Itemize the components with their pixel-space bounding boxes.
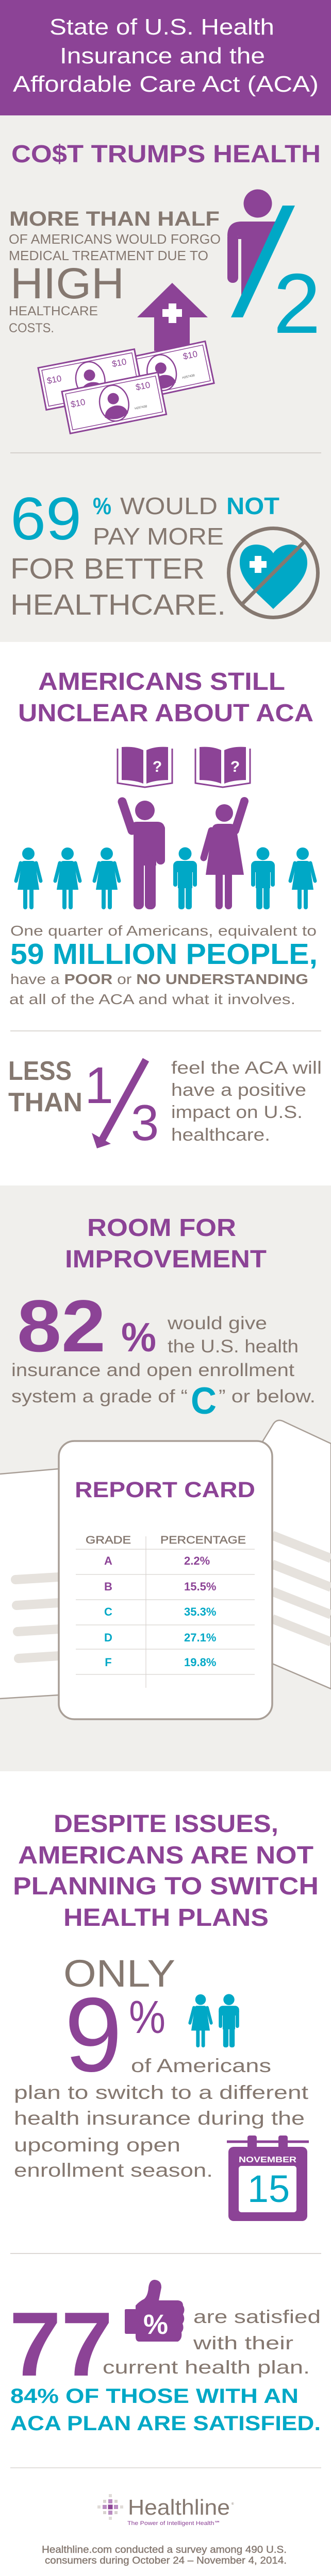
heading: HEALTH PLANS xyxy=(63,1904,269,1931)
heading: DESPITE ISSUES, xyxy=(54,1810,278,1838)
icon: ten dollar bills: $10 xyxy=(118,367,134,380)
icon: ten dollar bills: $10 xyxy=(70,397,86,410)
heading: AMERICANS STILL xyxy=(38,668,285,696)
stat: 77% satisfied: ACA PLAN ARE SATISFIED. xyxy=(10,2412,321,2435)
icon: ten dollar bills: H257438 xyxy=(135,405,148,411)
footer: healthline logo xyxy=(97,2494,234,2527)
stat: 82% xyxy=(11,1285,316,1422)
stat: 82%: C xyxy=(191,1380,217,1422)
title: Affordable Care Act (ACA) xyxy=(13,72,319,97)
stat: only 9%: % xyxy=(129,1992,166,2043)
stat: 77% satisfied: 77 xyxy=(9,2293,113,2395)
stat: less than one third: have a positive xyxy=(171,1080,306,1100)
text block: more than half: HEALTHCARE xyxy=(9,304,98,318)
table: GRADE xyxy=(86,1534,131,1546)
icon: ten dollar bills: H257438 xyxy=(182,374,195,380)
stat: 69% would not pay more: FOR BETTER xyxy=(10,552,205,585)
table: F xyxy=(105,1656,112,1669)
text block: more than half: MEDICAL TREATMENT DUE TO xyxy=(9,248,208,263)
table: 19.8% xyxy=(184,1656,216,1669)
panel: not planning to switch xyxy=(9,1810,321,2435)
stat: 82%: ” or below. xyxy=(219,1386,316,1406)
stat: 82%: % xyxy=(121,1314,156,1360)
icon: ten dollar bills: $10 xyxy=(135,380,151,393)
heading: ROOM FOR xyxy=(87,1214,236,1242)
icon: people row xyxy=(16,801,315,909)
icon: books with question marks: ? xyxy=(230,758,240,775)
stat: only 9%: 9 xyxy=(64,1976,122,2094)
icon: thumbs up with percent: % xyxy=(143,2309,168,2340)
text block: 59 million people: at all of the ACA and what it involves. xyxy=(9,991,295,1007)
table: PERCENTAGE xyxy=(160,1534,246,1546)
stat: 77% satisfied: with their xyxy=(193,2332,293,2353)
heading: UNCLEAR ABOUT ACA xyxy=(18,700,313,727)
icon: ten dollar bills: $10 xyxy=(111,357,127,369)
stat: 77% satisfied: are satisfied xyxy=(193,2306,321,2327)
stat: less than one third xyxy=(8,1056,322,1151)
report card xyxy=(59,1441,272,1719)
icon: half person with one-half: 2 xyxy=(273,256,321,351)
stat: only 9%: health insurance during the xyxy=(14,2108,305,2129)
stat: 69% would not pay more: 69 xyxy=(10,485,81,552)
table: D xyxy=(104,1631,112,1644)
text block: more than half: HIGH xyxy=(10,259,124,308)
icon: ten dollar bills: $10 xyxy=(182,349,198,362)
heading: PLANNING TO SWITCH xyxy=(13,1873,319,1900)
stat: 69% would not pay more: PAY MORE xyxy=(93,523,224,550)
stat: 69% would not pay more: WOULD xyxy=(120,493,218,519)
stat: less than one third: THAN xyxy=(8,1088,82,1117)
text block: more than half: OF AMERICANS WOULD FORGO xyxy=(9,231,221,247)
title xyxy=(13,14,319,97)
stat: 69% would not pay more: NOT xyxy=(226,493,279,519)
footer: source and copyright: consumers during October 24 – November 4, 2014. xyxy=(45,2555,287,2566)
big woman xyxy=(204,801,244,909)
heading xyxy=(65,1214,267,1273)
icon: no heart xyxy=(229,529,318,617)
table: 15.5% xyxy=(184,1580,216,1593)
icon: calendar november 15 xyxy=(227,2136,309,2221)
text block: more than half: COSTS. xyxy=(9,321,54,335)
stat: only 9%: upcoming open xyxy=(14,2134,180,2156)
icon: calendar november 15: 15 xyxy=(247,2167,290,2210)
heading: cost trumps health: CO$T TRUMPS HEALTH xyxy=(11,141,321,168)
icon: ten dollar bills: $10 xyxy=(46,374,62,386)
text block: 59 million people: 59 MILLION PEOPLE, xyxy=(10,938,318,971)
stat: only 9% xyxy=(14,1952,309,2181)
text block: 59 million people: One quarter of Americans, equivalent to xyxy=(10,923,317,939)
stat: 69% would not pay more xyxy=(10,485,279,621)
big man xyxy=(122,801,165,909)
text block: more than half: MORE THAN HALF xyxy=(9,208,220,230)
panel: cost trumps health xyxy=(0,115,331,642)
stat: 82%: 82 xyxy=(17,1285,106,1367)
report card: REPORT CARD xyxy=(75,1478,255,1502)
icon: books with question marks xyxy=(118,747,250,787)
icon: ten dollar bills xyxy=(38,341,214,433)
stat: less than one third: 1 xyxy=(85,1057,113,1114)
stat: only 9%: ONLY xyxy=(63,1952,175,1995)
header band xyxy=(0,0,331,115)
small teal women and men xyxy=(16,847,315,909)
stat: less than one third: 3 xyxy=(131,1094,159,1151)
heading xyxy=(18,668,313,727)
table: 27.1% xyxy=(184,1631,216,1644)
stat: only 9%: enrollment season. xyxy=(14,2160,213,2181)
stat: only 9%: plan to switch to a different xyxy=(14,2082,309,2103)
stat: less than one third: impact on U.S. xyxy=(171,1103,303,1122)
icon: calendar november 15: NOVEMBER xyxy=(239,2156,297,2164)
heading: IMPROVEMENT xyxy=(65,1246,267,1273)
panel: americans still unclear about aca xyxy=(8,668,322,1151)
title: State of U.S. Health xyxy=(49,14,274,40)
stat: 69% would not pay more: % xyxy=(93,493,111,519)
footer: healthline logo: ® xyxy=(231,2502,234,2506)
table: 35.3% xyxy=(184,1605,216,1618)
panel: room for improvement xyxy=(0,1185,331,1771)
stat: 77% satisfied: 84% OF THOSE WITH AN xyxy=(10,2385,299,2408)
table xyxy=(76,1534,255,1688)
text block: 59 million people xyxy=(9,923,318,1007)
table: 2.2% xyxy=(184,1554,210,1567)
heading xyxy=(13,1810,319,1931)
table: C xyxy=(104,1605,112,1618)
text block: 59 million people: have a POOR or NO UNDERSTANDING xyxy=(10,971,308,987)
icon: half person with one-half xyxy=(227,190,321,351)
text block: more than half xyxy=(9,208,221,335)
stat: less than one third: feel the ACA will xyxy=(171,1058,322,1078)
table: A xyxy=(104,1554,112,1567)
icon: thumbs up with percent xyxy=(125,2280,185,2342)
footer: source and copyright: Healthline.com conducted a survey among 490 U.S. xyxy=(42,2545,287,2555)
stat: 77% satisfied: current health plan. xyxy=(103,2357,310,2378)
stat: less than one third: LESS xyxy=(8,1056,72,1086)
heading: AMERICANS ARE NOT xyxy=(18,1842,313,1869)
stat: 82%: would give xyxy=(167,1313,267,1333)
icon: books with question marks: ? xyxy=(153,758,162,775)
icon: up arrow with cross xyxy=(137,283,208,351)
icon: woman and man xyxy=(190,1994,239,2047)
stat: 82%: the U.S. health xyxy=(168,1336,299,1357)
table: B xyxy=(104,1580,112,1593)
footer: source and copyright xyxy=(42,2545,287,2576)
stat: less than one third: healthcare. xyxy=(171,1125,270,1145)
background papers xyxy=(0,1420,331,1699)
stat: 69% would not pay more: HEALTHCARE. xyxy=(10,588,226,621)
stat: 82%: system a grade of “ xyxy=(11,1386,188,1406)
stat: 82%: insurance and open enrollment xyxy=(11,1360,294,1380)
footer: healthline logo: The Power of Intelligent Health℠ xyxy=(127,2520,221,2527)
footer: healthline logo: Healthline xyxy=(128,2495,230,2519)
stat: 77% satisfied xyxy=(9,2280,321,2435)
stat: only 9%: of Americans xyxy=(131,2055,271,2076)
title: Insurance and the xyxy=(60,43,265,69)
